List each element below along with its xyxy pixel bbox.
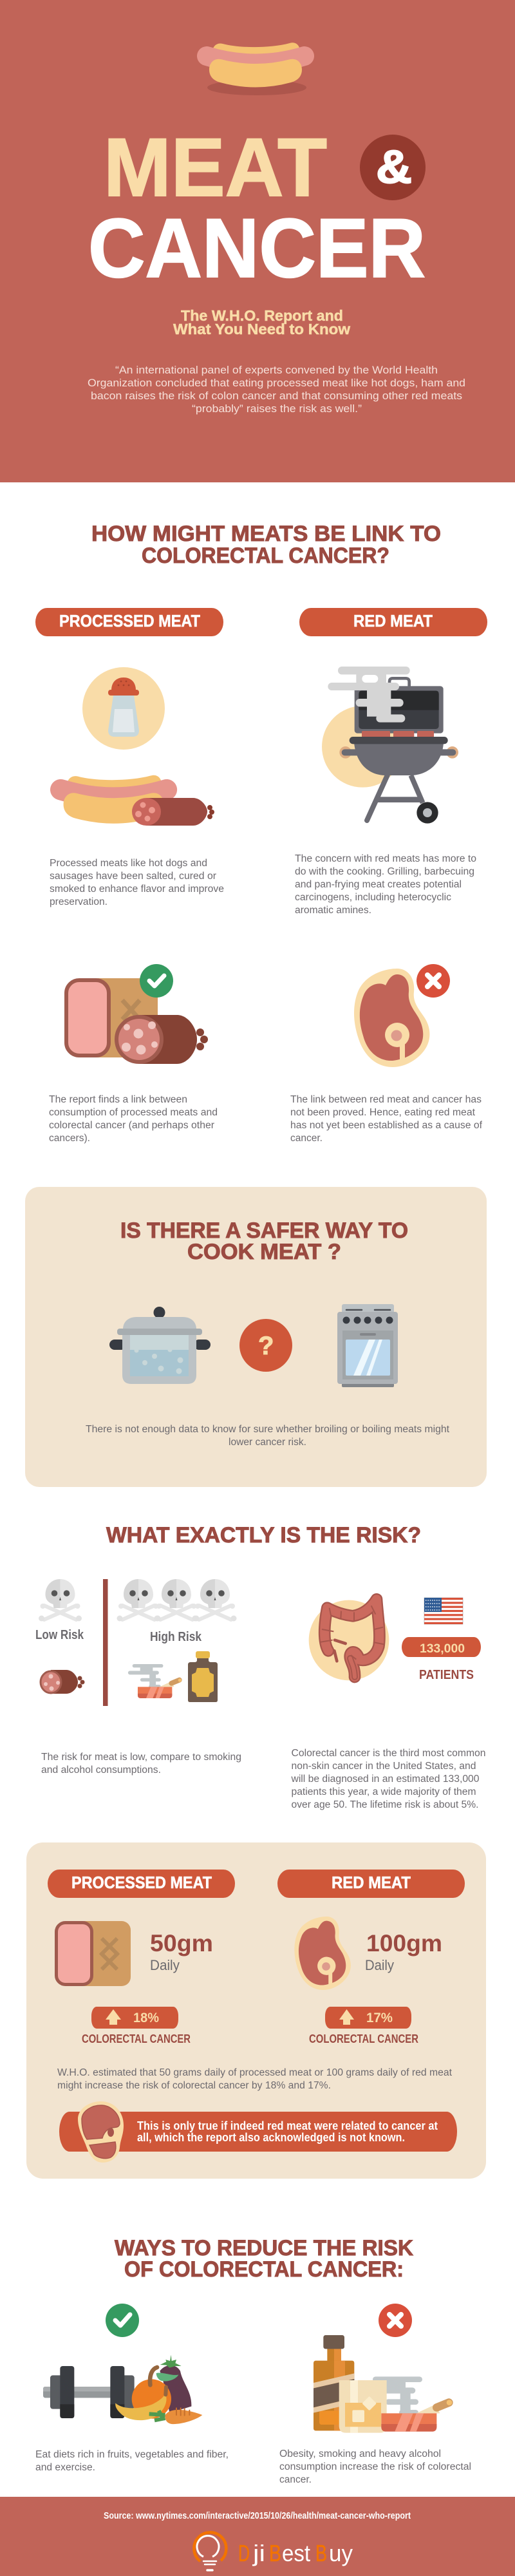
intro quote: “probably” raises the risk as well.” [192,403,362,415]
icon: salt shaker [82,667,165,750]
pill: processed meat [35,608,223,636]
text: link not proved: not been proved. Hence, eating red meat [290,1107,476,1118]
heading: safer way: COOK MEAT ? [187,1240,341,1264]
text: processed meats: smoked to enhance flavor and improve [50,884,224,895]
pill: red meat: RED MEAT [353,611,433,630]
text: red meat: aromatic amines. [295,905,371,916]
text: callout [137,2119,438,2144]
icon: US flag [424,1598,463,1624]
text: obesity smoking alcohol: Obesity, smoking and heavy alcohol [279,2448,441,2459]
panel: safer way to cook [25,1187,487,1487]
pill: processed meat: PROCESSED MEAT [71,1873,212,1892]
subtitle: The W.H.O. Report and [181,307,343,324]
text: callout: This is only true if indeed red meat were related to cancer at [137,2119,438,2132]
intro quote: “An international panel of experts convened by the World Health [115,365,438,376]
logo: wordmark: ji [252,2540,265,2566]
ampersand badge: & [376,142,412,193]
heading: how might meats be linked [91,522,441,568]
badge: 17 percent: 17% [366,2011,393,2025]
label: colorectal cancer: COLORECTAL CANCER [309,2032,418,2045]
text: link to cancer: consumption of processed meats and [49,1107,218,1118]
label: low risk: Low Risk [35,1628,84,1642]
logo: wordmark: B [315,2540,327,2566]
pill: red meat: RED MEAT [332,1873,411,1892]
text: callout: all, which the report also acknowledged is not known. [137,2130,405,2144]
badge: 18 percent: 18% [133,2011,159,2025]
icon: question mark: ? [258,1332,274,1360]
text: colorectal cancer stats [290,1748,485,1810]
text: risk for meat: and alcohol consumptions. [41,1765,161,1776]
text: eat diets [35,2449,229,2473]
text: processed meats: sausages have been salted, cured or [50,871,216,882]
pill: processed meat: PROCESSED MEAT [59,611,200,630]
text: not enough data: There is not enough data to know for sure whether broiling or boiling meats might [86,1424,450,1435]
text: link to cancer: colorectal cancer (and perhaps other [49,1120,214,1131]
icon: check [106,2304,139,2337]
text: obesity smoking alcohol [279,2448,471,2485]
ampersand badge [360,135,426,200]
text: link not proved: has not yet been established as a cause of [290,1120,483,1131]
text: not enough data [86,1424,450,1448]
logo: bulb [194,2532,226,2570]
icon: ham [57,1921,131,1986]
icon: small sausage [41,1670,85,1694]
heading: how might meats be linked: HOW MIGHT MEATS BE LINK TO [91,522,441,546]
badge: 18 percent [91,2007,178,2029]
text: who estimate [57,2067,453,2091]
icon: oven [337,1304,398,1387]
logo: wordmark: B [269,2540,281,2566]
text: red meat: and pan-frying meat creates potential [295,879,462,890]
text: colorectal cancer stats: over age 50. The lifetime risk is about 5%. [291,1799,479,1810]
subtitle: What You Need to Know [173,321,350,337]
heading: how might meats be linked: COLORECTAL CANCER? [142,544,389,568]
divider bar [103,1579,108,1706]
subtitle [173,307,350,337]
title: MEAT: MEAT [104,122,327,214]
text: link not proved [290,1094,483,1144]
icon: ham and sausage with check [66,964,208,1064]
label: patients: PATIENTS [419,1668,474,1682]
icon: steak [294,1917,351,1990]
text: obesity smoking alcohol: cancer. [279,2474,312,2485]
icon: boiling pot [109,1307,211,1384]
stat: 50gm daily: Daily [150,1957,180,1973]
callout banner [59,2101,457,2163]
pill: red meat [277,1870,465,1898]
badge: 17 percent [325,2007,411,2029]
logo: wordmark: D [238,2540,250,2566]
stat: 100gm daily: Daily [365,1957,394,1973]
logo: wordmark: uy [329,2540,353,2566]
text: red meat: carcinogens, including heterocyclic [295,892,451,903]
intro quote: Organization concluded that eating processed meat like hot dogs, ham and [88,377,465,389]
text: eat diets: and exercise. [35,2462,95,2473]
text: link not proved: The link between red meat and cancer has [290,1094,482,1105]
pill: processed meat [48,1870,235,1898]
heading: safer way [120,1218,408,1264]
text: colorectal cancer stats: Colorectal cancer is the third most common [291,1748,485,1759]
icon: steak with cross [354,964,450,1067]
text: processed meats: Processed meats like hot dogs and [50,858,207,869]
text: eat diets: Eat diets rich in fruits, vegetables and fiber, [35,2449,229,2460]
text: not enough data: lower cancer risk. [229,1437,306,1448]
icon: dumbbell and produce [43,2355,202,2424]
hero background [0,0,515,482]
text: who estimate: might increase the risk of colorectal cancer by 18% and 17%. [57,2080,331,2091]
icon: barbecue grill [322,667,458,824]
stat: 100gm daily [365,1930,442,1973]
text: red meat [295,853,476,916]
text: risk for meat: The risk for meat is low, compare to smoking [41,1752,241,1763]
text: red meat: do with the cooking. Grilling, barbecuing [295,866,474,877]
icon: cross [379,2304,412,2337]
source line: Source: www.nytimes.com/interactive/2015/10/26/health/meat-cancer-who-report [104,2511,411,2521]
stat: 50gm daily [150,1930,213,1973]
footer [0,2497,515,2576]
pill: red meat [299,608,487,636]
text: who estimate: W.H.O. estimated that 50 grams daily of processed meat or 100 grams daily of red meat [57,2067,453,2078]
text: processed meats: preservation. [50,896,108,907]
logo: wordmark [238,2540,353,2566]
heading: safer way: IS THERE A SAFER WAY TO [120,1218,408,1243]
intro quote [88,365,465,415]
title: CANCER: CANCER [88,201,426,295]
text: link not proved: cancer. [290,1133,323,1144]
text: colorectal cancer stats: non-skin cancer in the United States, and [291,1761,476,1772]
pill: 133,000: 133,000 [420,1642,465,1656]
text: link to cancer: The report finds a link between [49,1094,187,1105]
text: obesity smoking alcohol: consumption increase the risk of colorectal [279,2461,471,2472]
icon: bottle glass and ashtray [314,2335,452,2433]
text: link to cancer [49,1094,218,1144]
intro quote: bacon raises the risk of colon cancer and that consuming other red meats [91,390,462,402]
label: high risk: High Risk [150,1630,202,1644]
icon: low risk skull [39,1579,82,1622]
pill: 133,000 [402,1637,481,1657]
icon: steak cut [78,2101,124,2163]
icon: hot dog and sausage [61,775,214,826]
logo: wordmark: est [282,2540,310,2566]
text: processed meats [50,858,224,907]
icon: question mark [239,1319,292,1372]
heading: ways to reduce [115,2236,413,2282]
label: colorectal cancer: COLORECTAL CANCER [82,2032,191,2045]
icon: high risk skulls [117,1579,237,1622]
icon: colon [309,1599,389,1680]
heading: ways to reduce: OF COLORECTAL CANCER: [124,2257,404,2282]
panel: daily amounts [26,1842,486,2179]
icon: liquor bottle [188,1651,218,1702]
heading: what exactly is the risk: WHAT EXACTLY IS THE RISK? [106,1523,421,1548]
text: red meat: The concern with red meats has more to [295,853,476,864]
stat: 100gm daily: 100gm [366,1930,442,1956]
text: colorectal cancer stats: will be diagnosed in an estimated 133,000 [290,1774,480,1785]
text: risk for meat [41,1752,241,1776]
icon: hot dog [207,43,306,95]
text: link to cancer: cancers). [49,1133,90,1144]
text: colorectal cancer stats: patients this year, a wide majority of them [291,1786,476,1797]
stat: 50gm daily: 50gm [150,1930,213,1956]
icon: ashtray and cigarette [128,1664,182,1698]
heading: ways to reduce: WAYS TO REDUCE THE RISK [115,2236,413,2260]
